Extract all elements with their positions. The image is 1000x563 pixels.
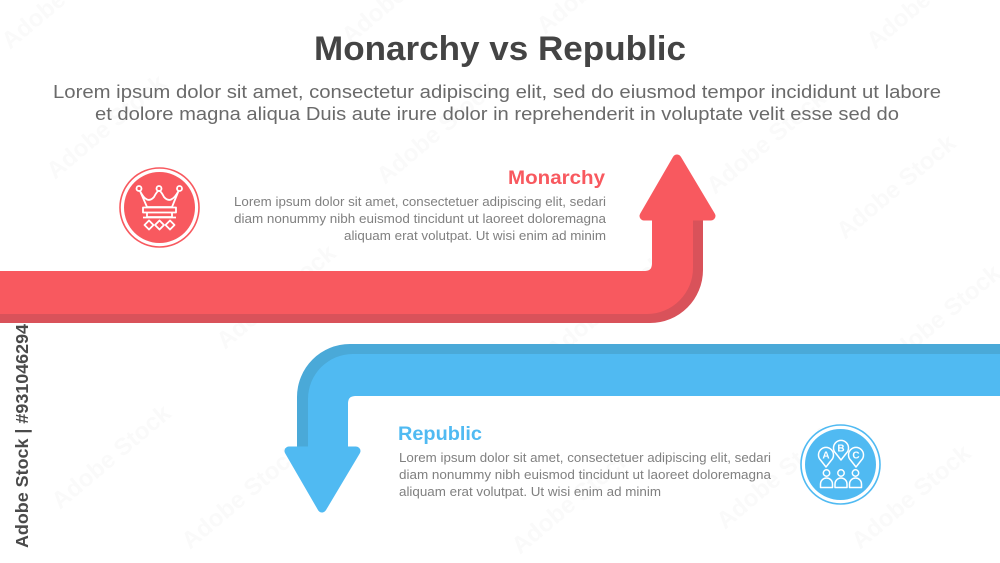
text block: republic [399, 450, 772, 499]
icon: republic voters: A [822, 450, 830, 462]
watermark pattern: Adobe Stock [177, 439, 307, 555]
title: Monarchy vs Republic [314, 30, 686, 68]
heading: republic: Republic [398, 423, 482, 445]
watermark pattern: Adobe Stock [507, 444, 637, 560]
watermark pattern: Adobe Stock [212, 239, 342, 355]
icon: republic voters: B [837, 444, 845, 454]
intro text: et dolore magna aliqua Duis aute irure dolor in reprehenderit in voluptate velit esse sed do [95, 104, 899, 124]
icon: republic voters: C [852, 450, 860, 462]
watermark pattern: Adobe Stock [702, 84, 832, 200]
watermark pattern: Adobe Stock [847, 439, 977, 555]
text block: republic: diam nonummy nibh euismod tincidunt ut laoreet doloremagna [399, 467, 772, 482]
watermark pattern: Adobe Stock [372, 74, 502, 190]
text block: republic: aliquam erat volutpat. Ut wisi enim ad minim [399, 484, 661, 499]
watermark pattern: Adobe Stock [542, 249, 672, 365]
intro text [53, 82, 941, 124]
text block: monarchy: Lorem ipsum dolor sit amet, consectetuer adipiscing elit, sedari [234, 194, 606, 209]
icon: monarchy crown [120, 168, 199, 247]
stock id label: Adobe Stock | #931046294 [12, 324, 32, 548]
blue arrow: republic [289, 344, 1000, 508]
watermark pattern: Adobe Stock [42, 69, 172, 185]
heading: monarchy: Monarchy [508, 167, 605, 189]
text block: republic: Lorem ipsum dolor sit amet, consectetuer adipiscing elit, sedari [399, 450, 771, 465]
watermark pattern: Adobe Stock [47, 399, 177, 515]
watermark pattern: Adobe Stock [712, 419, 842, 535]
icon: republic voters [801, 425, 880, 504]
watermark pattern: Adobe Stock [832, 129, 962, 245]
text block: monarchy: aliquam erat volutpat. Ut wisi enim ad minim [344, 228, 606, 243]
text block: monarchy [234, 194, 607, 243]
intro text: Lorem ipsum dolor sit amet, consectetur adipiscing elit, sed do eiusmod tempor incididunt ut labore [53, 82, 941, 102]
text block: monarchy: diam nonummy nibh euismod tincidunt ut laoreet doloremagna [234, 211, 607, 226]
red arrow: monarchy [0, 159, 711, 323]
